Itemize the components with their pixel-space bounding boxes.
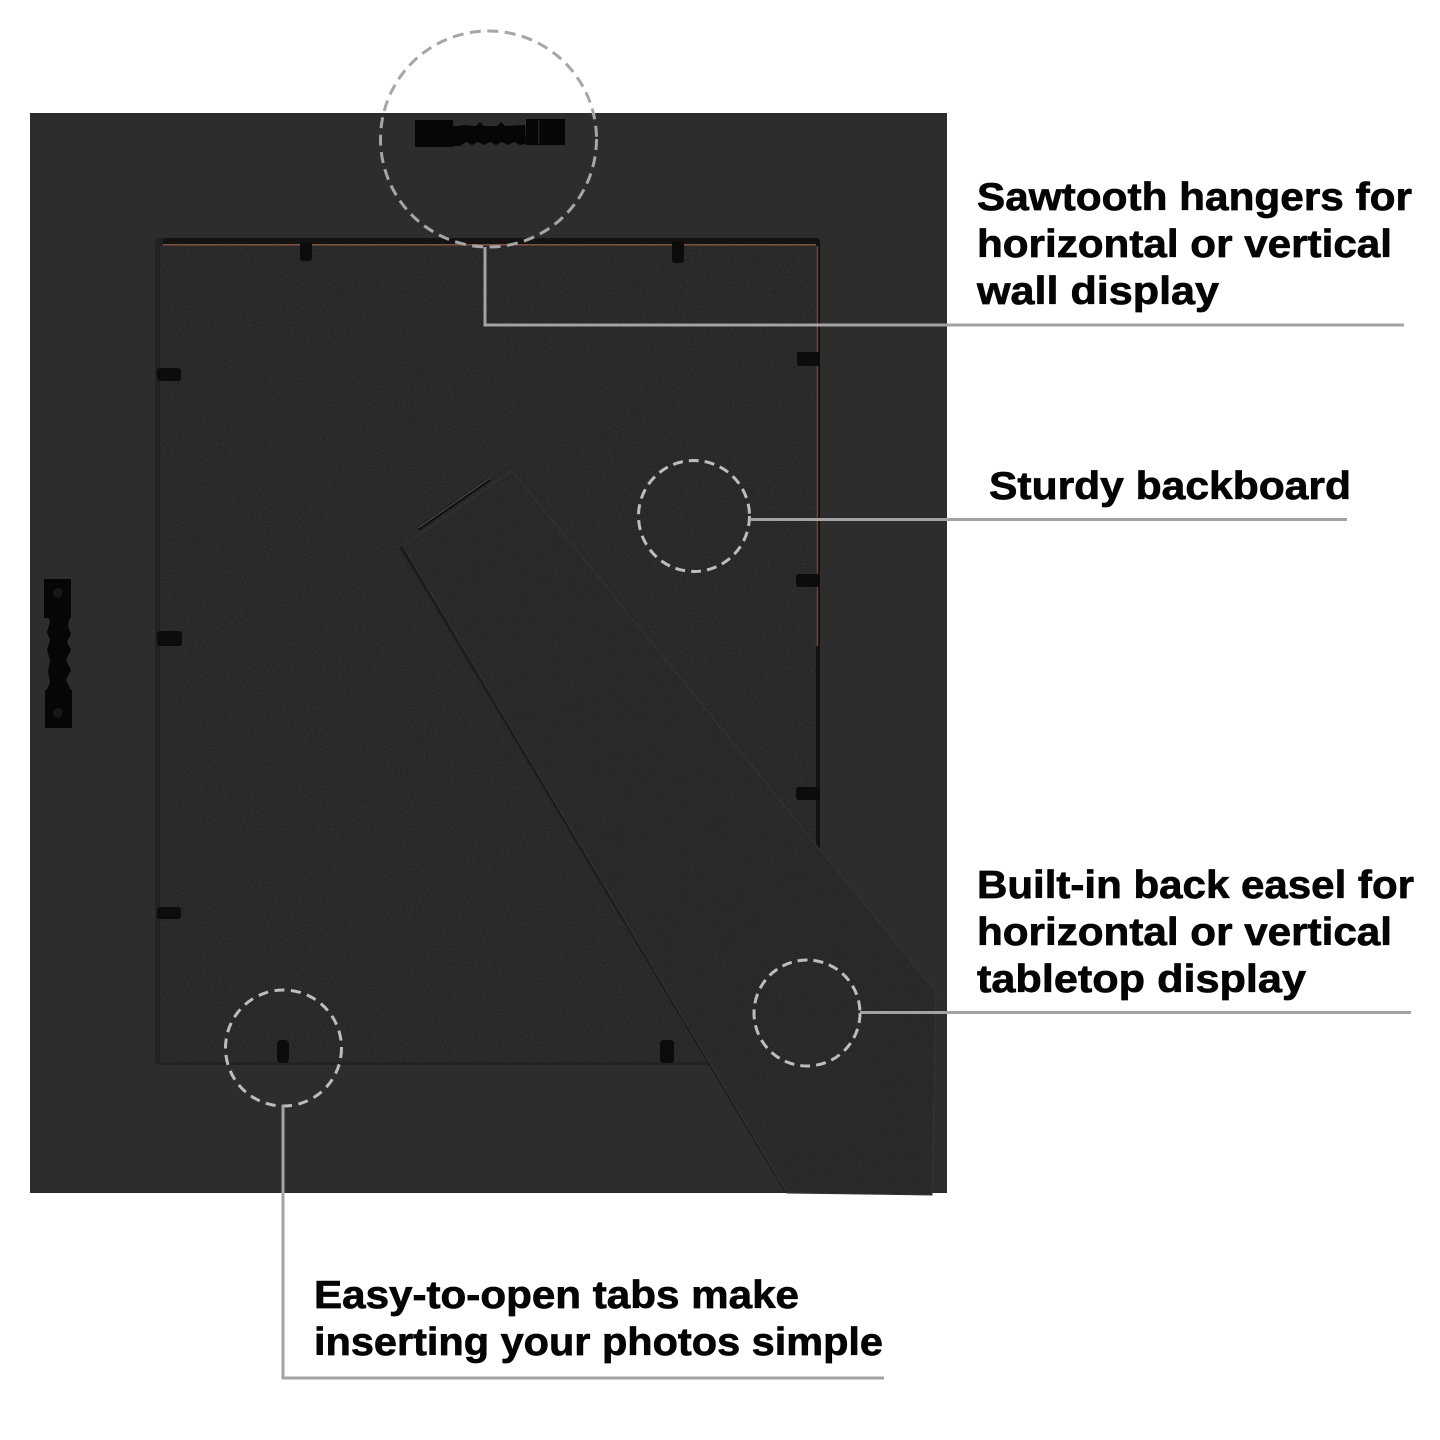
top groove shadow: [163, 238, 820, 245]
label text: Sturdy backboard: [989, 465, 1351, 508]
photo frame back: [30, 113, 947, 1196]
label text: wall display: [976, 270, 1219, 313]
callout circle: [638, 460, 750, 572]
label text: tabletop display: [977, 958, 1306, 1001]
backboard texture: [160, 246, 816, 1062]
right groove shadow: [815, 240, 820, 860]
label text: Sawtooth hangers for: [977, 176, 1412, 219]
leader line: [485, 247, 1404, 325]
label text: [314, 1274, 883, 1364]
label text: Built-in back easel for: [977, 864, 1414, 907]
callout circle: [380, 31, 596, 247]
easel slot: [418, 478, 490, 529]
retaining tabs: [157, 241, 820, 1063]
label text: horizontal or vertical: [977, 223, 1392, 266]
easel texture: [432, 488, 932, 1190]
leader line: [283, 1105, 884, 1378]
label text: inserting your photos simple: [314, 1321, 883, 1364]
backboard: [160, 246, 816, 1062]
frame opening edge: [155, 238, 820, 1065]
frame body: [30, 113, 947, 1193]
callout circle: [226, 990, 342, 1106]
callout: back easel: [754, 864, 1414, 1066]
label text: horizontal or vertical: [977, 911, 1392, 954]
icon: side sawtooth hanger: [44, 579, 72, 728]
label text: [976, 176, 1412, 313]
icon: top sawtooth hanger: [415, 119, 565, 147]
label text: Easy-to-open tabs make: [314, 1274, 799, 1317]
leader line: [860, 1011, 1411, 1014]
easel stand: [403, 471, 936, 1195]
right copper edge: [816, 246, 818, 646]
copper rabbet line: [163, 244, 816, 246]
callout: easy-to-open tabs: [226, 990, 884, 1378]
callout: sawtooth hangers: [380, 31, 1412, 325]
callout: sturdy backboard: [638, 460, 1351, 572]
leader line: [750, 518, 1347, 521]
callout circle: [754, 960, 860, 1066]
label text: [977, 864, 1414, 1001]
easel shadow: [400, 545, 789, 1193]
